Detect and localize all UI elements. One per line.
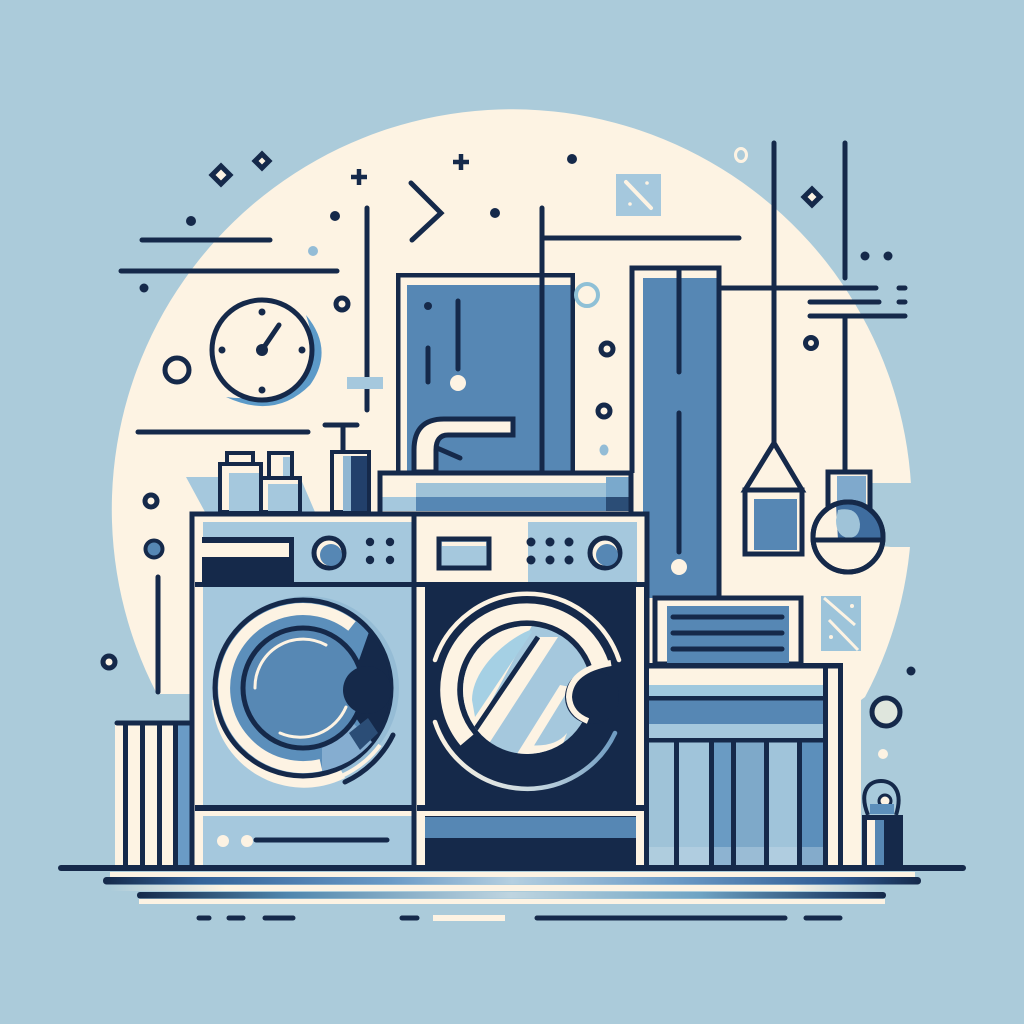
icon: pendant lamp triangle [745,443,802,554]
panel: tall cabinet [631,268,719,598]
icon: faucet [414,419,513,472]
icon: padlock bottle [862,781,903,867]
panel: mirror cabinet [396,238,575,473]
icon: knob [314,538,344,568]
top centre symbols [411,154,739,240]
drum [435,594,619,789]
dots and ring right [872,666,916,759]
button dots [526,538,574,564]
icon: knob [590,538,620,568]
bottom drawer [217,835,387,847]
decorative lines upper left [121,208,367,692]
floor dashes [199,915,840,921]
control panel display [202,537,294,582]
drum [212,596,399,788]
sink counter [380,473,631,513]
small tile right [821,596,861,651]
cream sun disc backdrop [112,109,925,868]
floor bars [58,865,966,904]
panel: right washing machine [415,514,647,867]
scattered dots, rings and diamonds left [103,154,469,668]
icon: bottles on the washer [186,425,369,512]
icon: pendant lamp round [813,472,883,572]
panel: storage cabinet [646,663,843,868]
panel: monitor box [655,598,801,664]
hanging lines and dashes upper right [721,143,905,472]
icon: wall clock [212,300,322,406]
panel: radiator [115,723,192,867]
panel: left washing machine [192,513,416,867]
display window [439,539,489,568]
button dots [366,538,394,564]
small rings centre [576,284,613,456]
